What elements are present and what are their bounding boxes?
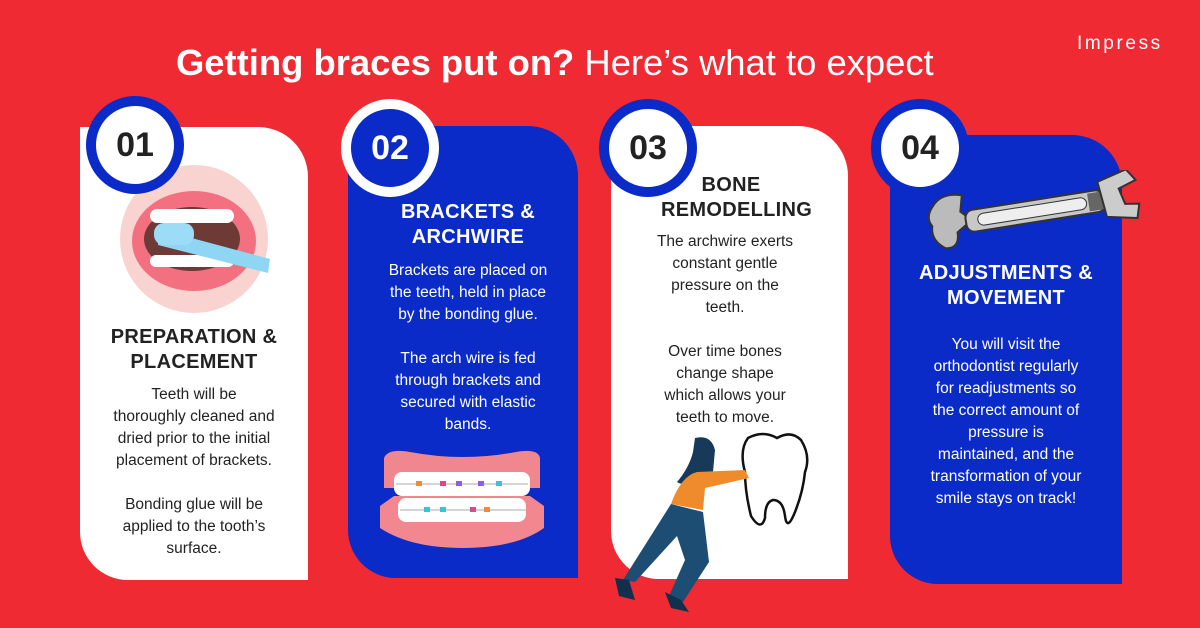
heading: BRACKETS & bbox=[401, 201, 535, 223]
brand logo: Impress bbox=[1077, 33, 1163, 54]
badge 04: 04 bbox=[901, 128, 939, 166]
body text bbox=[930, 336, 1082, 507]
body text: Bonding glue will be bbox=[125, 496, 263, 513]
heading bbox=[111, 326, 277, 373]
illustration: woman pushing tooth bbox=[615, 432, 808, 612]
body text: teeth to move. bbox=[676, 409, 774, 426]
body text: Brackets are placed on bbox=[389, 262, 547, 279]
body text: change shape bbox=[676, 365, 774, 382]
body text: Teeth will be bbox=[151, 386, 237, 403]
heading: PREPARATION & bbox=[111, 326, 277, 348]
body text bbox=[389, 262, 547, 433]
icon: wrench bbox=[928, 170, 1140, 250]
body text: The arch wire is fed bbox=[400, 350, 536, 367]
icon: teeth with braces bbox=[380, 450, 544, 548]
heading: MOVEMENT bbox=[947, 287, 1065, 309]
heading: PLACEMENT bbox=[130, 351, 258, 373]
panel: step 3 bbox=[611, 126, 848, 579]
heading bbox=[661, 174, 812, 221]
body text: thoroughly cleaned and bbox=[113, 408, 275, 425]
panel: step 2 bbox=[348, 126, 578, 578]
panel: step 1 bbox=[80, 127, 308, 580]
heading bbox=[401, 201, 535, 248]
heading: ADJUSTMENTS & bbox=[919, 262, 1093, 284]
body text: placement of brackets. bbox=[116, 452, 272, 469]
body text: secured with elastic bbox=[400, 394, 536, 411]
heading bbox=[919, 262, 1093, 309]
body text: maintained, and the bbox=[938, 446, 1074, 463]
body text: the teeth, held in place bbox=[390, 284, 546, 301]
body text: pressure on the bbox=[671, 277, 779, 294]
panel: step 4 bbox=[890, 135, 1122, 584]
heading: ARCHWIRE bbox=[412, 226, 524, 248]
badge 01 bbox=[86, 96, 184, 194]
body text: Over time bones bbox=[668, 343, 782, 360]
body text: The archwire exerts bbox=[657, 233, 793, 250]
body text bbox=[657, 233, 793, 426]
body text: through brackets and bbox=[395, 372, 541, 389]
body text: transformation of your bbox=[931, 468, 1081, 485]
badge 01: 01 bbox=[116, 126, 154, 164]
icon: mouth with toothbrush bbox=[120, 165, 270, 313]
body text: surface. bbox=[166, 540, 222, 557]
badge 02 bbox=[341, 99, 439, 197]
body text: for readjustments so bbox=[936, 380, 1076, 397]
body text: constant gentle bbox=[672, 255, 778, 272]
badge 04 bbox=[871, 99, 969, 197]
badge 03: 03 bbox=[629, 128, 667, 166]
body text: You will visit the bbox=[952, 336, 1060, 353]
title: Getting braces put on? Here’s what to expect bbox=[176, 42, 934, 83]
heading: BONE bbox=[702, 174, 760, 196]
body text: which allows your bbox=[664, 387, 786, 404]
body text: pressure is bbox=[968, 424, 1044, 441]
body text: orthodontist regularly bbox=[934, 358, 1078, 375]
badge 02: 02 bbox=[371, 128, 409, 166]
body text: dried prior to the initial bbox=[118, 430, 270, 447]
badge 03 bbox=[599, 99, 697, 197]
body text: applied to the tooth’s bbox=[123, 518, 265, 535]
body text: smile stays on track! bbox=[936, 490, 1076, 507]
body text: bands. bbox=[445, 416, 491, 433]
body text: by the bonding glue. bbox=[398, 306, 538, 323]
body text bbox=[113, 386, 275, 557]
body text: the correct amount of bbox=[933, 402, 1079, 419]
heading: REMODELLING bbox=[661, 199, 812, 221]
body text: teeth. bbox=[706, 299, 744, 316]
